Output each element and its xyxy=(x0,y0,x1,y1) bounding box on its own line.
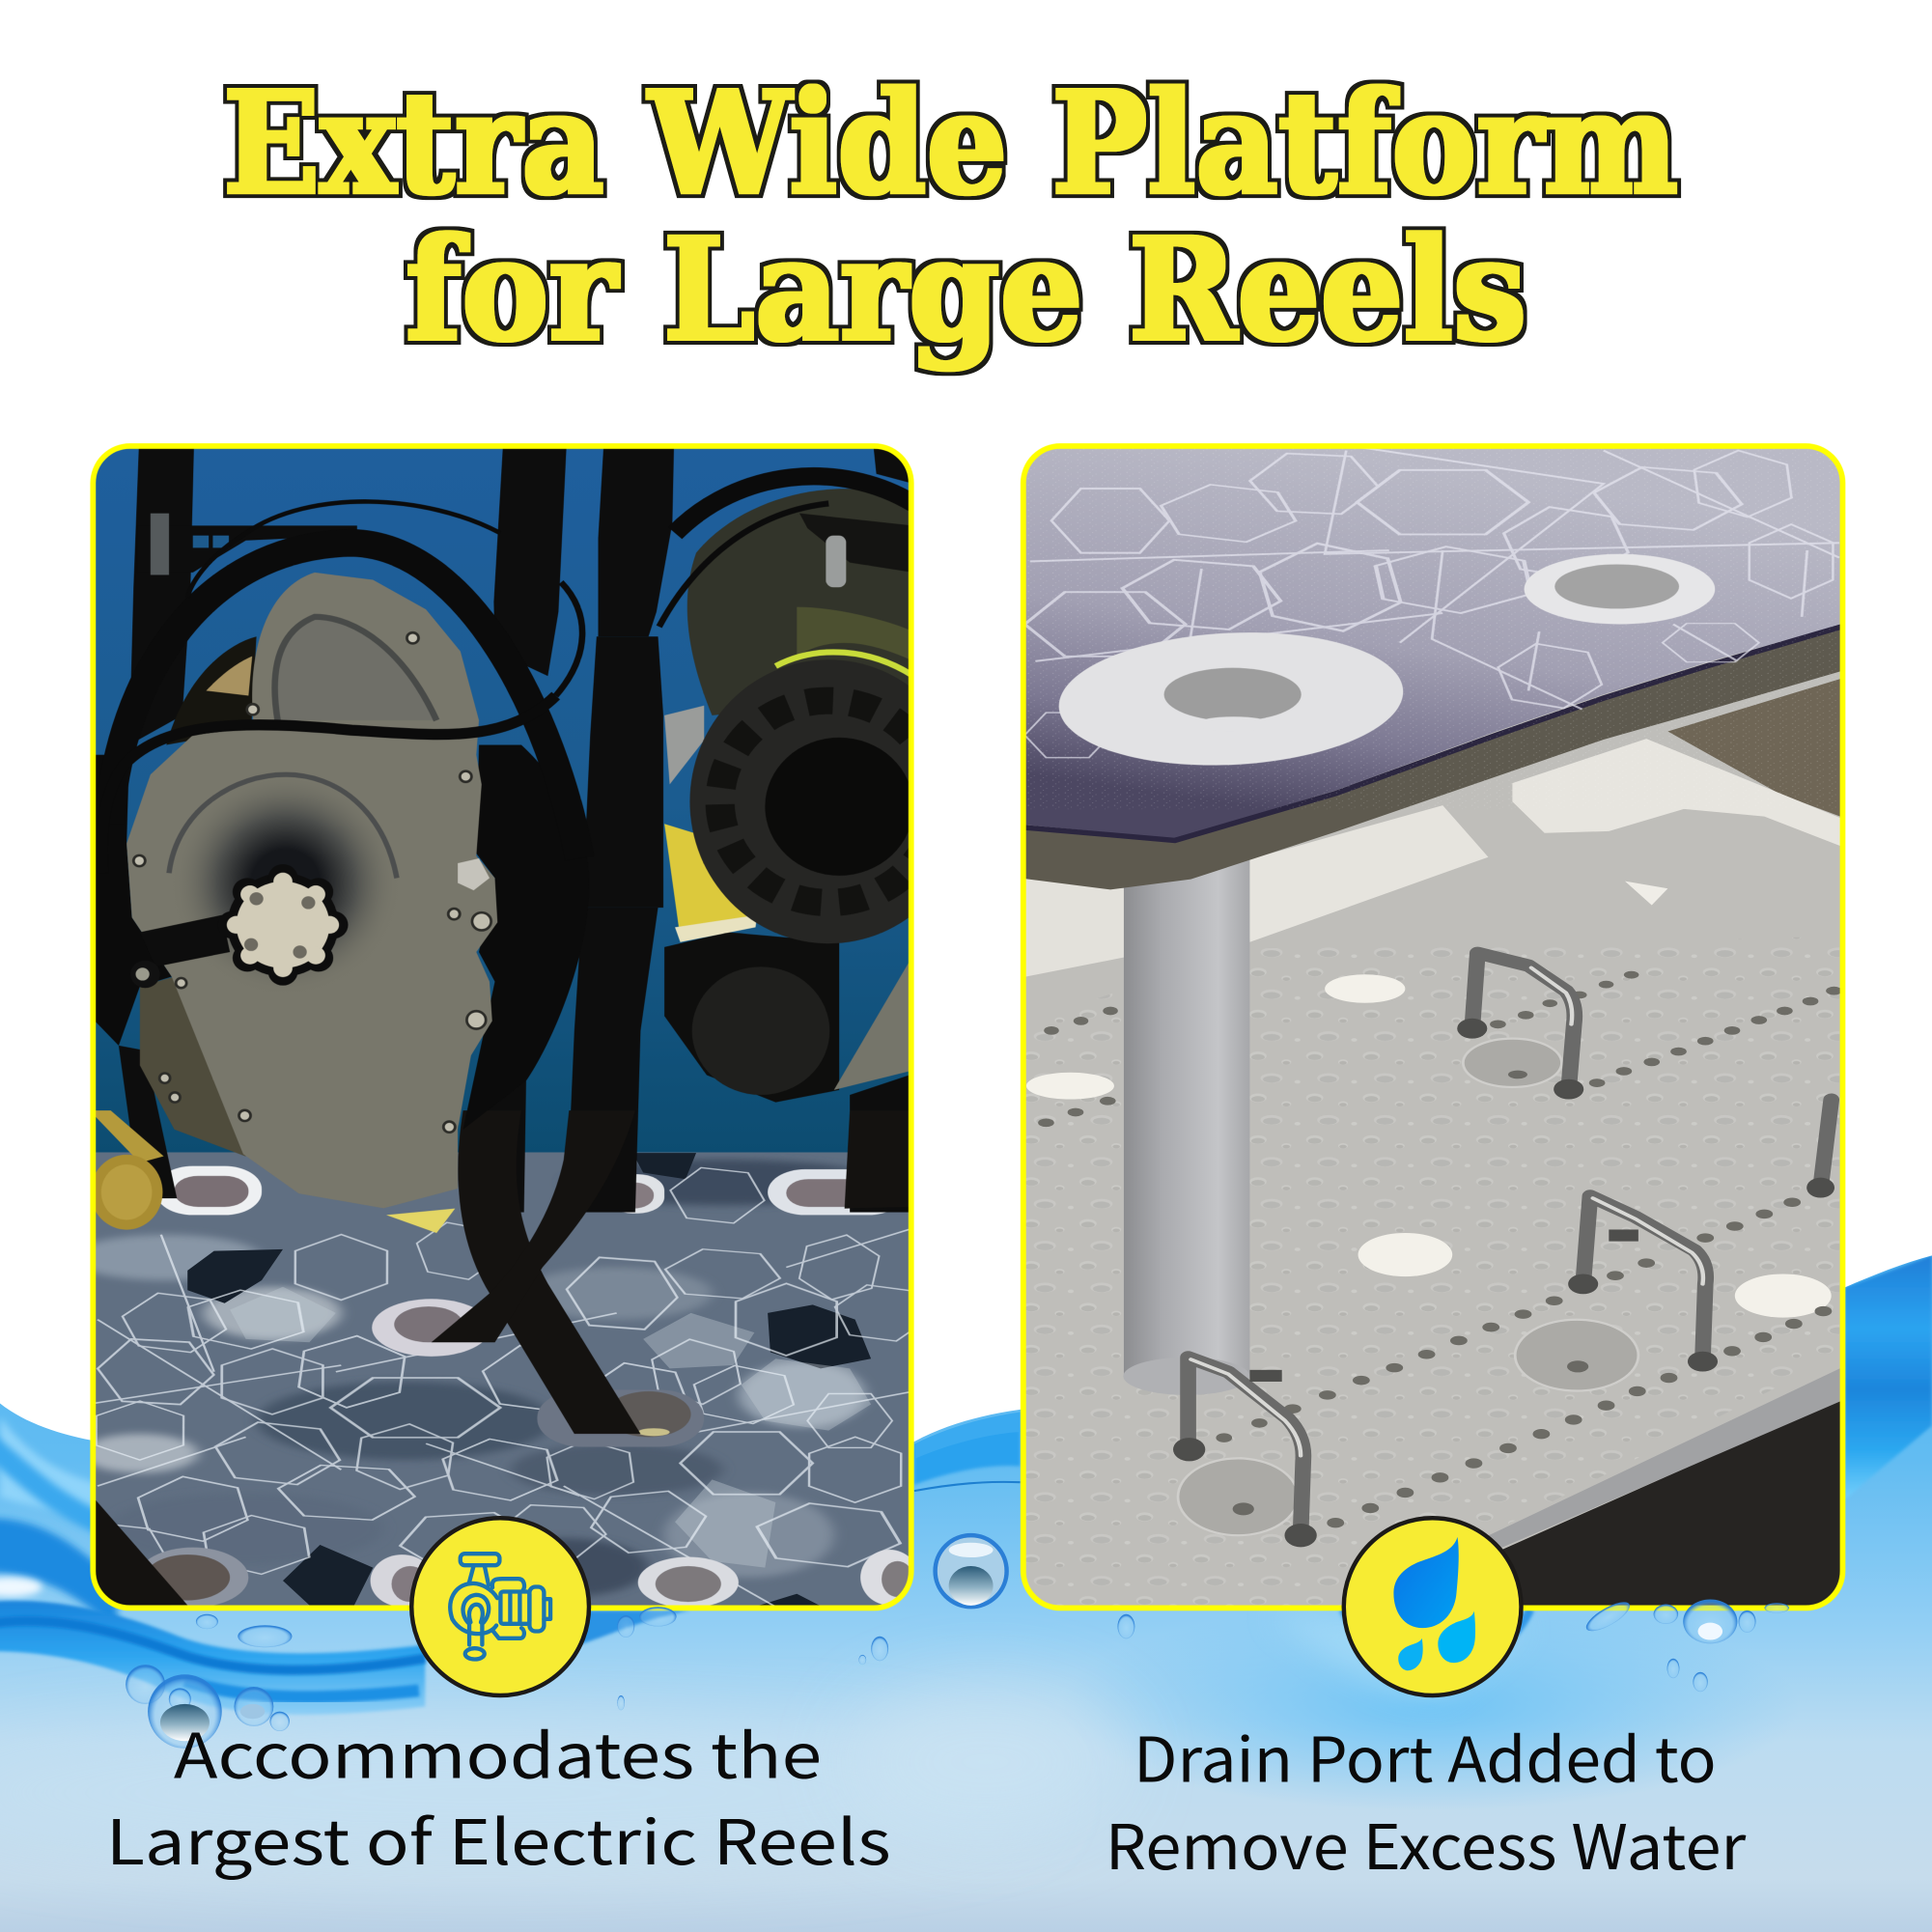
caption: drain port: Drain Port Added to xyxy=(1134,1711,1717,1800)
dark deck cut-outs xyxy=(187,1153,871,1610)
sunlit and gravel areas xyxy=(1014,676,1850,979)
platform lip and dark ground xyxy=(1330,1363,1850,1610)
second reel and spool xyxy=(657,467,910,1103)
sea backdrop xyxy=(93,446,911,1161)
gold crank xyxy=(90,1110,455,1233)
drain recesses xyxy=(1178,1039,1638,1535)
panel: electric reels photo xyxy=(65,446,967,1616)
reel mount holes xyxy=(137,1166,918,1608)
caption: electric reels: Largest of Electric Reels xyxy=(106,1794,891,1883)
panel border xyxy=(93,446,911,1608)
round mounting plate xyxy=(1525,554,1715,624)
hexagon line pattern xyxy=(65,1165,937,1607)
caption: drain port xyxy=(1106,1711,1747,1888)
lower platform details xyxy=(1026,856,1850,1610)
table column xyxy=(1123,856,1249,1395)
cable loops xyxy=(95,501,589,1130)
water droplet texture xyxy=(1025,937,1839,1608)
housing screws xyxy=(133,632,491,1133)
upper rods xyxy=(119,448,913,1212)
table top xyxy=(1014,439,1854,889)
wet sparkle xyxy=(1014,439,1850,809)
chrome rail handles xyxy=(1189,953,1832,1533)
electric reel body xyxy=(102,573,556,1208)
platform base xyxy=(1022,592,1843,1610)
water background xyxy=(0,1232,1932,1932)
caption: electric reels xyxy=(106,1707,891,1883)
lower curved pipes xyxy=(95,1110,910,1606)
title line 1: Extra Wide Platform xyxy=(223,61,1678,226)
panel: drain port photo xyxy=(1014,439,1854,1610)
lighter hexagon facets xyxy=(230,1287,871,1568)
sun spots xyxy=(1026,974,1832,1318)
caption: electric reels: Accommodates the xyxy=(174,1707,822,1796)
icon badge: electric motor xyxy=(411,1518,589,1695)
reel crank arm xyxy=(140,915,230,966)
icon: electric motor xyxy=(450,1554,550,1660)
deck surface xyxy=(65,1152,937,1616)
dotted drain holes xyxy=(1038,971,1842,1527)
fishing rod holder xyxy=(799,514,913,573)
body cable xyxy=(132,691,560,765)
panel border xyxy=(1023,446,1842,1608)
icon badge: water drops xyxy=(1344,1518,1522,1695)
water droplets: bubbles xyxy=(126,1597,1789,1749)
star knob xyxy=(218,864,348,986)
oval mounting plate xyxy=(1050,623,1412,774)
icon: water drops xyxy=(1393,1537,1475,1670)
caption: drain port: Remove Excess Water xyxy=(1106,1799,1747,1888)
rod bracket xyxy=(137,514,357,574)
table top geometric lines xyxy=(1024,443,1854,758)
water droplet between panels xyxy=(936,1535,1007,1607)
title line 2: for Large Reels xyxy=(406,208,1526,373)
title xyxy=(223,61,1678,373)
